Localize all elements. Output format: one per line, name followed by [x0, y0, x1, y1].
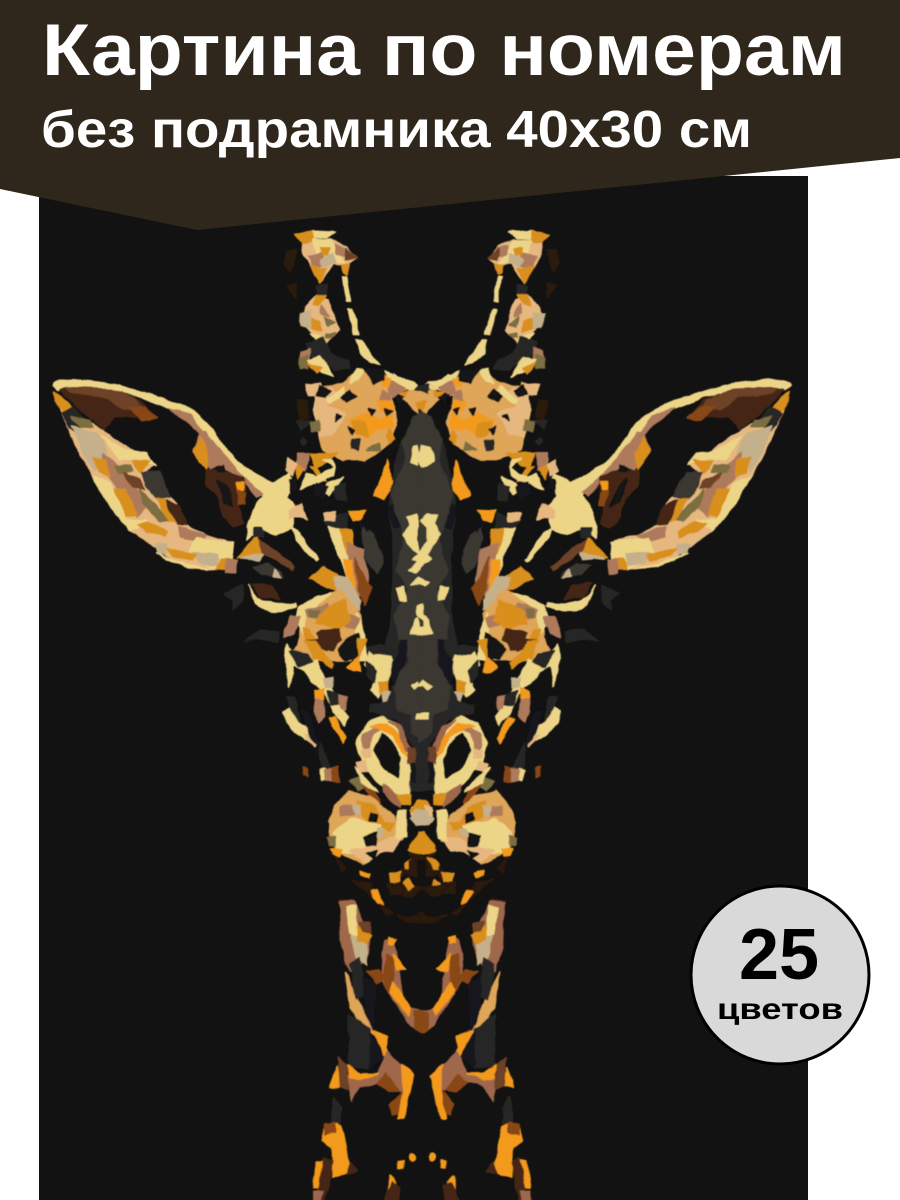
neck base spots	[313, 1097, 415, 1200]
neck inner V marking	[367, 936, 430, 1032]
badge: 25 colours: 25	[739, 915, 819, 995]
chin spots	[337, 858, 457, 922]
badge: 25 colours	[691, 886, 869, 1064]
left ear	[53, 379, 273, 569]
badge: 25 colours: цветов	[717, 993, 843, 1026]
brow and lower horn base	[287, 453, 392, 530]
left nostril	[350, 717, 415, 808]
left eye	[248, 583, 297, 612]
forehead blaze	[360, 410, 435, 660]
lower face spots	[283, 640, 393, 781]
painting canvas	[39, 176, 808, 1200]
title line 1: Картина по номерам	[42, 10, 846, 91]
title line 2: без подрамника 40х30 см	[41, 101, 752, 159]
giraffe illustration	[53, 230, 791, 1200]
ear base and cheek patch	[225, 473, 318, 642]
neck lower marking	[330, 1031, 413, 1119]
lower blaze	[370, 640, 427, 790]
left muzzle	[328, 790, 448, 864]
cheek stripes and patch	[283, 527, 382, 660]
left horn	[283, 230, 379, 420]
neck upper stripes	[338, 899, 388, 1069]
forehead patch	[297, 367, 450, 460]
mirrored right half of giraffe	[387, 230, 791, 1200]
title banner	[0, 0, 900, 230]
